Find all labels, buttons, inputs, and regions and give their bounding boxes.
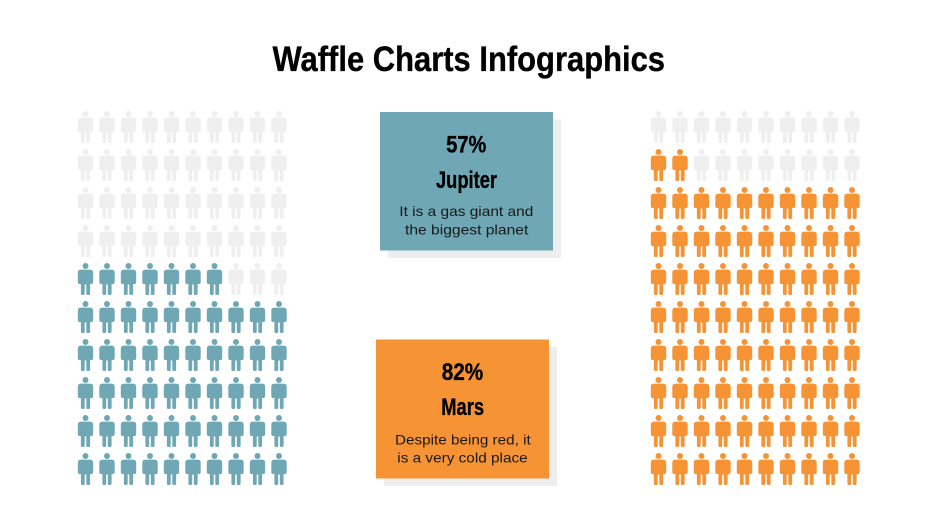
waffle chart: Jupiter 57% [78,111,287,485]
description: Despite being red, it [395,432,531,447]
panel: Jupiter [380,112,561,258]
waffle chart: Mars 82% [651,111,860,485]
percentage: 82% [442,359,483,386]
description: It is a gas giant and [399,204,533,219]
card [380,112,553,250]
name: Mars [441,394,484,421]
card shadow [388,120,561,258]
description [395,432,531,466]
filled people [651,149,860,485]
description: the biggest planet [405,222,529,237]
description [399,204,533,237]
percentage: 57% [446,131,486,158]
filled people [78,263,287,485]
name: Jupiter [436,167,497,194]
card [376,340,549,478]
panel: Mars [376,340,557,486]
title: Waffle Charts Infographics [272,40,665,79]
description: is a very cold place [397,451,528,466]
empty people [651,111,860,181]
card shadow [384,347,557,486]
empty people [78,111,287,295]
